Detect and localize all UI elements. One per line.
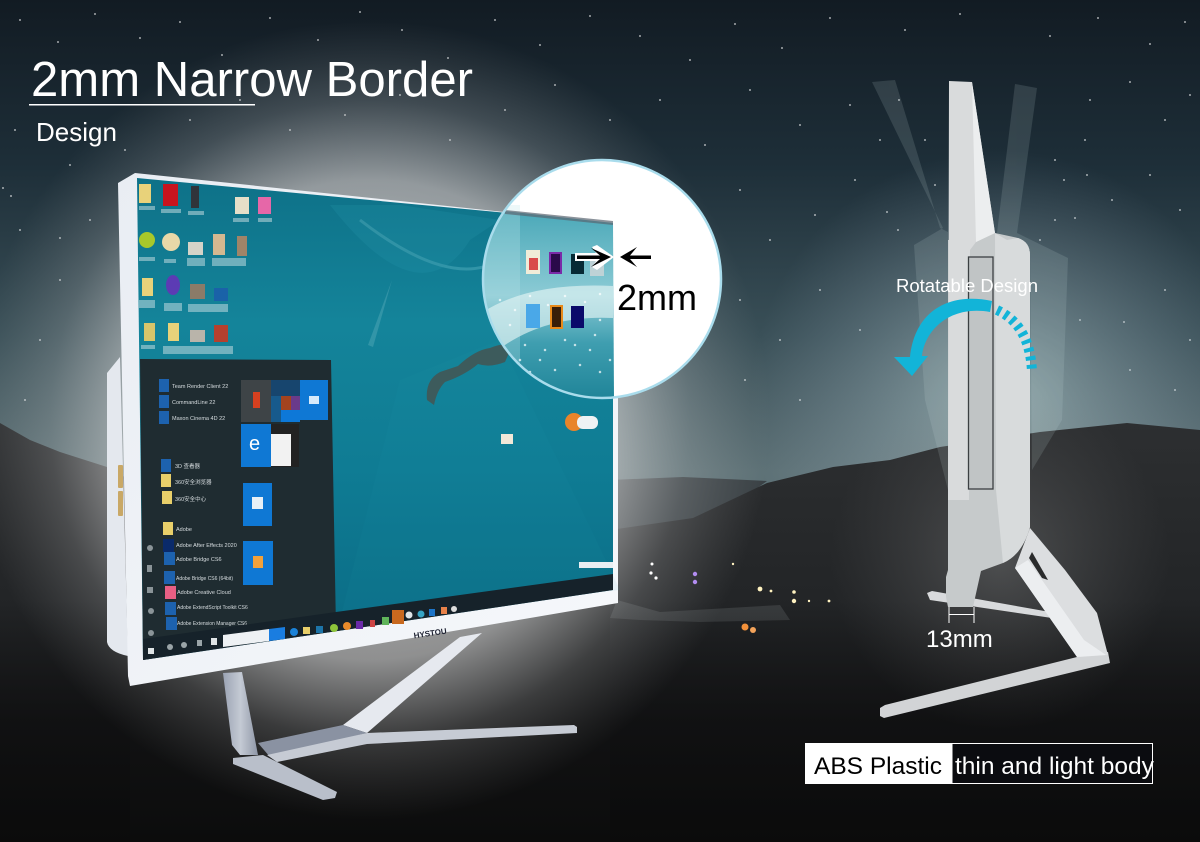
- search button: [269, 627, 285, 641]
- background: dark hill left: [0, 423, 130, 842]
- start menu left rail icons: [147, 545, 154, 636]
- menu list: Adobe ExtendScript Toolkit CS6: [177, 605, 248, 611]
- magnifier callout: [483, 160, 721, 400]
- menu list: 360安全中心: [175, 495, 207, 503]
- side monitor ghost positions: [872, 80, 1068, 490]
- menu list: Maxon Cinema 4D 22: [172, 416, 225, 422]
- desktop small icon: [501, 434, 513, 444]
- menu list: Adobe After Effects 2020: [176, 543, 237, 549]
- arrow: white outlined right arrow: [575, 245, 614, 270]
- background: town lights: [649, 562, 830, 633]
- background: floor fade: [0, 600, 1200, 842]
- rotatable design label: Rotatable Design: [896, 276, 1038, 296]
- material badge: [805, 743, 1155, 784]
- 13mm label: 13mm: [926, 626, 993, 653]
- diver silhouette: [427, 344, 512, 405]
- menu list: Adobe Bridge CS6: [176, 557, 222, 563]
- desktop icon captions: [139, 206, 272, 354]
- monitor bezel: [118, 173, 618, 686]
- menu list: 3D 查看器: [175, 462, 201, 470]
- side: rear housing: [995, 233, 1030, 563]
- stand: short foot: [233, 755, 337, 800]
- badge: thin and light body: thin and light body: [955, 753, 1155, 780]
- desktop notification banner: [579, 562, 613, 568]
- stand: long foot bar: [267, 725, 577, 762]
- side: body: [946, 233, 1030, 607]
- taskbar app icons: [290, 606, 457, 636]
- magnifier ring: [483, 160, 721, 398]
- side: rear leg inner highlight: [1015, 560, 1106, 657]
- badge: ABS Plastic: [805, 743, 952, 784]
- side: vent slot: [968, 257, 993, 489]
- background: dark ridge right: [600, 423, 1200, 842]
- monitor rear body: [107, 357, 128, 656]
- badge: ABS Plastic: ABS Plastic: [814, 753, 942, 780]
- usb ports: [118, 465, 123, 516]
- background: glow behind front monitor: [0, 20, 770, 820]
- 2mm label: 2mm: [617, 277, 697, 318]
- wallpaper light rays: [330, 205, 620, 620]
- badge: thin and light body: [952, 744, 1155, 784]
- title: 2mm Narrow Border: [31, 53, 473, 107]
- menu list: [159, 379, 248, 630]
- side: back foot: [927, 591, 1052, 618]
- monitor screen wallpaper: [137, 178, 613, 660]
- side: display panel: [948, 81, 995, 500]
- magnifier white disc: [483, 160, 721, 398]
- side: rear leg gap: [1029, 552, 1048, 580]
- background: starfield: [3, 12, 1190, 400]
- 13mm dimension: [926, 607, 993, 653]
- menu list: 360安全浏览器: [175, 478, 212, 486]
- search box: [223, 629, 269, 647]
- background: mid ground: [130, 470, 610, 842]
- arrow: solid curved sweep: [894, 299, 992, 376]
- rotation arrow: [894, 299, 1032, 376]
- subtitle: Design: [36, 117, 117, 147]
- title underline: [29, 104, 255, 106]
- taskbar: [143, 574, 613, 660]
- start menu tiles: [241, 380, 328, 585]
- taskbar start and search buttons: [148, 638, 217, 654]
- desktop icons: [139, 184, 272, 354]
- front monitor stand: [223, 633, 577, 800]
- arrow: dashed tail: [997, 310, 1032, 372]
- stand: rear arm: [343, 633, 482, 733]
- stand: connector: [258, 725, 367, 757]
- dimension bracket: [949, 607, 974, 623]
- menu list: Adobe Bridge CS6 (64bit): [176, 576, 233, 582]
- menu list: Adobe Extension Manager CS6: [177, 621, 247, 627]
- desktop widget: [565, 413, 598, 431]
- brand logo on bezel: HYSTOU: [413, 627, 448, 640]
- arrow: black left arrow: [620, 247, 651, 267]
- menu list: Adobe: [176, 527, 192, 533]
- menu list: Adobe Creative Cloud: [177, 590, 231, 596]
- background: far hill: [610, 477, 767, 530]
- side monitor: [880, 81, 1110, 718]
- stand: front arm: [223, 672, 258, 755]
- menu list: CommandLine 22: [172, 400, 215, 406]
- magnified screen: [483, 205, 614, 400]
- start menu tiles: e: [249, 433, 260, 455]
- front monitor: [107, 173, 620, 686]
- background: sky glow behind side monitor: [750, 150, 1200, 650]
- side: base plate: [880, 652, 1110, 718]
- background: haze behind side monitor foot: [830, 390, 1170, 730]
- menu list: Team Render Client 22: [172, 384, 228, 390]
- background: lake: [610, 600, 790, 622]
- background: floor glow under front monitor: [0, 560, 720, 822]
- side: rear leg: [1015, 528, 1108, 657]
- magnified app icons: [526, 250, 604, 329]
- start menu panel: [140, 359, 336, 660]
